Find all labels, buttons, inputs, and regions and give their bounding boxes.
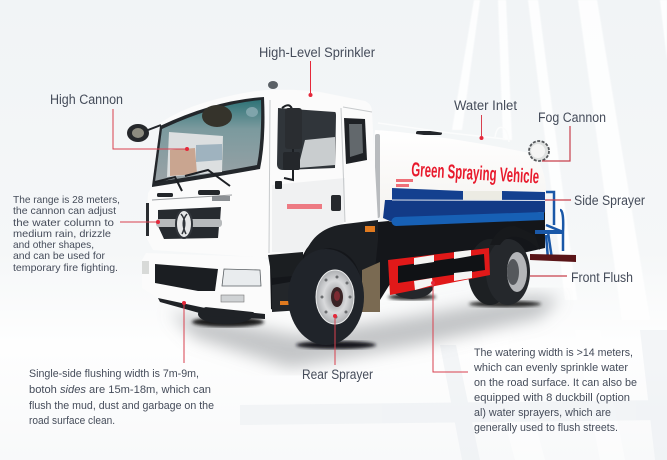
side mirror: [127, 124, 161, 142]
text block: watering description: generally used to flush streets.: [474, 422, 618, 434]
text block: flushing description: botoh sides are 15m-18m, which can: [29, 384, 211, 396]
door red mark: [287, 204, 322, 209]
truck illustration: [127, 81, 576, 349]
text block: high cannon description: [13, 194, 120, 274]
label: Water Inlet with leader: [454, 98, 517, 140]
text block: high cannon description: and other shapes,: [13, 239, 94, 251]
grille with emblem: [146, 190, 232, 239]
text block: high cannon description: the cannon can adjust: [13, 205, 116, 217]
fog cannon: [529, 141, 549, 161]
label: Fog Cannon with leader: Fog Cannon: [538, 110, 606, 125]
rear ladder: [535, 192, 563, 259]
ground shadow: [170, 295, 560, 368]
front wheel arch: [303, 220, 378, 300]
label: High Cannon with leader: High Cannon: [50, 92, 123, 107]
front bumper: [142, 253, 271, 313]
rear dual wheel: [468, 239, 530, 305]
side pipe: [392, 212, 544, 226]
tank title: Green Spraying Vehicle: Green Spraying Vehicle: [411, 159, 540, 188]
text block: flushing description: flush the mud, dust and garbage on the: [29, 400, 214, 412]
text block: high cannon description: the water column to: [13, 217, 114, 229]
text block: watering description: The watering width is >14 meters,: [474, 347, 633, 359]
roof beacon: [268, 81, 278, 89]
mudguard over rear wheel: [490, 226, 540, 250]
text block: watering description: equipped with 8 duckbill (option: [474, 392, 630, 404]
door mirror: [275, 105, 302, 189]
tank body: [374, 130, 546, 222]
label: Rear Sprayer with leader: [302, 314, 373, 382]
rear cab window: [344, 118, 367, 164]
cab step: [268, 226, 380, 312]
text block: watering description: al) water sprayers, which are: [474, 407, 611, 419]
text block: watering description: [473, 347, 637, 434]
rear bumper bar: [530, 254, 576, 262]
label: High Cannon with leader: [50, 92, 189, 151]
door seams: [269, 100, 372, 253]
bumper grille: [155, 264, 218, 291]
text block: high cannon description: medium rain, drizzle: [13, 228, 111, 240]
label: Water Inlet with leader: Water Inlet: [454, 98, 517, 113]
tank railing: [378, 123, 509, 142]
cab body: [146, 90, 378, 258]
text block: high cannon description: and can be used for: [13, 250, 105, 262]
front wheel: [288, 249, 364, 345]
door shading: [272, 178, 345, 253]
dark windshield: [152, 97, 264, 187]
label: Side Sprayer with leader: [545, 193, 645, 208]
label: Side Sprayer with leader: Side Sprayer: [574, 193, 645, 208]
text block: flushing description: [29, 368, 214, 427]
red and white side guard: [388, 248, 490, 295]
text block: watering description: on the road surface. It can also be: [474, 377, 637, 389]
text block: high cannon description: The range is 28 meters,: [13, 194, 120, 206]
leader: watering description to side guard: [431, 281, 468, 372]
text block: high cannon description: temporary fire fighting.: [13, 262, 118, 274]
leader: cannon description to grille: [120, 220, 160, 224]
label: High-Level Sprinkler with leader: High-Level Sprinkler: [259, 45, 375, 60]
label: Front Flush with leader: Front Flush: [571, 270, 633, 285]
headlight: [142, 261, 261, 302]
text block: watering description: which can evenly sprinkle water: [473, 362, 628, 374]
chassis and rear shadow: [192, 205, 545, 349]
label: Front Flush with leader: [530, 270, 633, 285]
wipers: [155, 170, 230, 191]
text block: flushing description: road surface clean.: [29, 415, 115, 427]
door window: [277, 108, 336, 170]
small red tank marks: [396, 179, 413, 187]
label: Rear Sprayer with leader: Rear Sprayer: [302, 367, 373, 382]
label: High-Level Sprinkler with leader: [259, 45, 375, 97]
leader: flush description to bumper: [182, 301, 186, 363]
label: Fog Cannon with leader: [538, 110, 606, 161]
text block: flushing description: Single-side flushing width is 7m-9m,: [29, 368, 199, 380]
